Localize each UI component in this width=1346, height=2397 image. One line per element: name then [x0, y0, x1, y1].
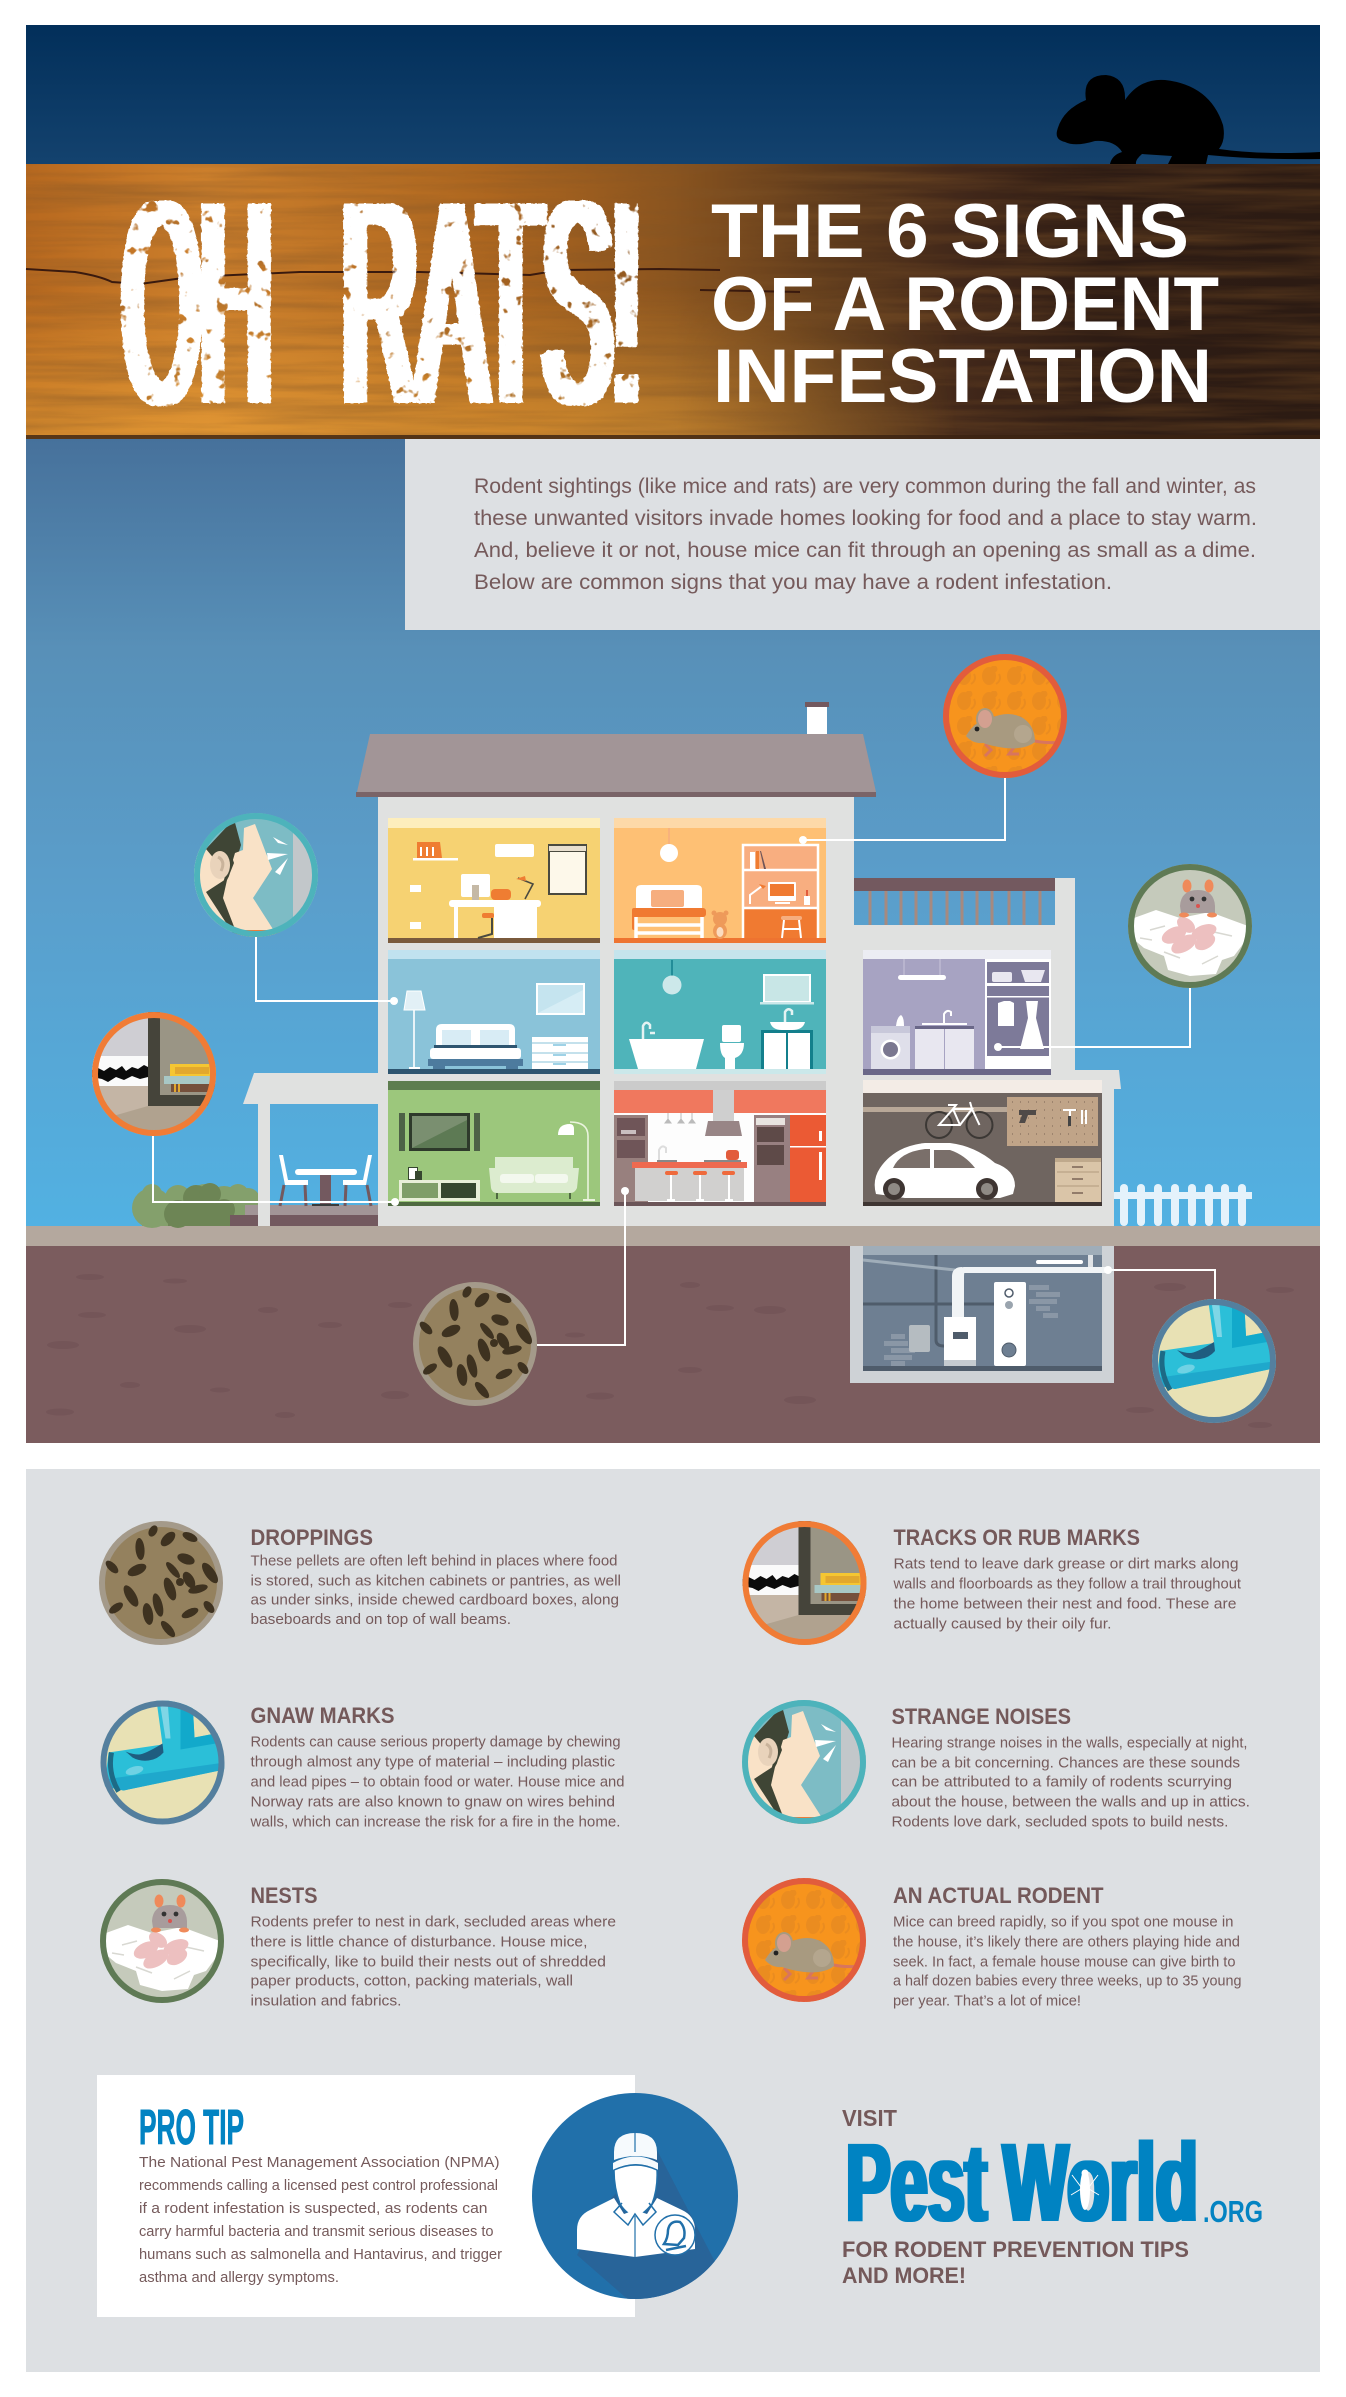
- panel: signs list background: [26, 1469, 1320, 2372]
- text: pro tip body: recommends calling a licensed pest control professional: [139, 2177, 498, 2194]
- sign: an actual rodent: [742, 1878, 1242, 2010]
- icon: pest professional badge: [532, 2093, 740, 2310]
- heading: pro tip: PRO TIP: [139, 2101, 244, 2155]
- sign: gnaw marks: and lead pipes – to obtain food or water. House mice and: [250, 1775, 624, 1791]
- sign: strange noises: [742, 1700, 1250, 1831]
- icon: termite in logo: [1071, 2170, 1099, 2210]
- callout icon: strange noises: [194, 813, 318, 938]
- sign: strange noises: about the house, between the walls and up in attics.: [892, 1795, 1250, 1811]
- panel: introduction text: Rodent sightings (like mice and rats) are very common during the fall and winter, as: [474, 475, 1256, 498]
- callout icon: tracks or rub marks: [92, 1012, 216, 1136]
- panel: introduction text: these unwanted visitors invade homes looking for food and a place to stay warm.: [474, 507, 1257, 530]
- text: pro tip body: if a rodent infestation is suspected, as rodents can: [139, 2200, 487, 2217]
- sign: tracks or rub marks: [742, 1521, 1241, 1645]
- sign: tracks or rub marks: the home between their nest and food. These are: [894, 1596, 1236, 1612]
- text: pro tip body: humans such as salmonella and Hantavirus, and trigger: [139, 2246, 502, 2263]
- sign: droppings: is stored, such as kitchen cabinets or pantries, as well: [250, 1573, 621, 1589]
- room: garage: [863, 1080, 1102, 1206]
- sign: tracks or rub marks: actually caused by their oily fur.: [894, 1616, 1112, 1632]
- panel: introduction text: [405, 439, 1320, 630]
- panel: wooden title plank: [26, 164, 1320, 439]
- room: laundry: [863, 950, 1051, 1075]
- sign: nests: Rodents prefer to nest in dark, secluded areas where: [250, 1914, 616, 1930]
- callout connector lines: [153, 778, 1215, 1345]
- sign: droppings: as under sinks, inside chewed cardboard boxes, along: [250, 1593, 619, 1609]
- sign: an actual rodent: per year. That’s a lot of mice!: [893, 1994, 1081, 2010]
- text: for rodent prevention tips: [842, 2237, 1189, 2288]
- sign: nests: insulation and fabrics.: [250, 1994, 402, 2010]
- balcony railing: [854, 878, 1055, 925]
- text: pro tip body: [139, 2154, 502, 2286]
- panel: introduction text: Below are common signs that you may have a rodent infestation.: [474, 571, 1112, 594]
- sign: nests: specifically, like to build their nests out of shredded: [250, 1954, 606, 1970]
- title: The 6 signs of a rodent infestation: THE 6 SIGNS: [711, 189, 1189, 274]
- sign: gnaw marks: [100, 1700, 624, 1831]
- sign: nests: paper products, cotton, packing materials, wall: [250, 1974, 573, 1990]
- logo: PestWorld.org: World: [1003, 2120, 1198, 2245]
- house walls and roof: [356, 702, 1121, 1226]
- sign: gnaw marks: walls, which can increase the risk for a fire in the home.: [249, 1815, 620, 1831]
- sign: strange noises: STRANGE NOISES: [892, 1704, 1071, 1729]
- sign: nests: [100, 1879, 616, 2010]
- sign: gnaw marks: through almost any type of material – including plastic: [250, 1755, 615, 1771]
- room: bathroom: [614, 950, 826, 1074]
- sign: an actual rodent: a half dozen babies every three weeks, up to 35 young: [893, 1974, 1242, 1990]
- callout icon: nests: [1128, 864, 1252, 988]
- icon: bushes: [132, 1183, 260, 1228]
- porch with table and chairs: [230, 1073, 378, 1226]
- logo: PestWorld.org: Pest: [846, 2120, 987, 2245]
- icon: mouse silhouette on the plank: [1057, 75, 1320, 164]
- sign: strange noises: can be a bit concerning. Chances are these sounds: [892, 1755, 1240, 1771]
- callout icon: gnaw marks: [1152, 1299, 1276, 1423]
- text: for rodent prevention tips: AND MORE!: [842, 2263, 966, 2288]
- room: kitchen: [614, 1081, 826, 1206]
- sign: droppings: These pellets are often left behind in places where food: [250, 1553, 618, 1569]
- sign: tracks or rub marks: walls and floorboards as they follow a trail throughout: [892, 1576, 1241, 1592]
- sign: an actual rodent: seek. In fact, a female house mouse can give birth to: [893, 1954, 1236, 1970]
- panel: pro tip: [97, 2075, 635, 2317]
- room: basement: [850, 1246, 1114, 1383]
- sign: gnaw marks: Norway rats are also known to gnaw on wires behind: [250, 1795, 615, 1811]
- text: pro tip body: asthma and allergy symptoms.: [139, 2269, 339, 2286]
- callout icon: droppings: [416, 1285, 535, 1403]
- sign: strange noises: can be attributed to a family of rodents scurrying: [892, 1775, 1232, 1791]
- white picket fence: [1114, 1184, 1252, 1226]
- sign: tracks or rub marks: Rats tend to leave dark grease or dirt marks along: [894, 1556, 1238, 1572]
- room: office: [388, 818, 600, 943]
- panel: introduction text: And, believe it or not, house mice can fit through an opening as small as a dime.: [474, 539, 1256, 562]
- room: bedroom: [388, 950, 600, 1074]
- title: Oh Rats!: OH: [123, 141, 272, 465]
- room: kids bedroom: [614, 818, 826, 943]
- logo: PestWorld.org: .ORG: [1203, 2194, 1263, 2229]
- sign: tracks or rub marks: TRACKS OR RUB MARKS: [894, 1525, 1140, 1550]
- text: for rodent prevention tips: FOR RODENT PREVENTION TIPS: [842, 2237, 1189, 2262]
- title: The 6 signs of a rodent infestation: OF A RODENT: [711, 262, 1219, 347]
- title: The 6 signs of a rodent infestation: [711, 189, 1219, 419]
- sign: an actual rodent: the house, it’s likely there are others playing hide and: [893, 1934, 1240, 1950]
- sign: an actual rodent: Mice can breed rapidly, so if you spot one mouse in: [893, 1914, 1234, 1930]
- text: pro tip body: The National Pest Management Association (NPMA): [139, 2154, 500, 2171]
- panel: wooden title plank: RATS!: [342, 141, 641, 465]
- sign: strange noises: Hearing strange noises in the walls, especially at night,: [892, 1736, 1248, 1752]
- panel: night sky background: [26, 25, 1320, 1226]
- logo: PestWorld.org: [846, 2120, 1263, 2245]
- room: living room: [388, 1081, 600, 1206]
- sign: nests: there is little chance of disturbance. House mice,: [250, 1934, 588, 1950]
- callout icon: actual rodent: [943, 654, 1067, 778]
- sign: strange noises: Rodents love dark, secluded spots to build nests.: [892, 1815, 1228, 1831]
- ground strip and soil: [26, 1226, 1320, 1443]
- sign: nests: NESTS: [250, 1883, 318, 1908]
- sign: an actual rodent: AN ACTUAL RODENT: [893, 1883, 1104, 1908]
- sign: gnaw marks: GNAW MARKS: [250, 1703, 394, 1728]
- sign: droppings: [102, 1524, 621, 1642]
- sign: droppings: DROPPINGS: [250, 1525, 373, 1550]
- sign: gnaw marks: Rodents can cause serious property damage by chewing: [250, 1735, 620, 1751]
- text: pro tip body: carry harmful bacteria and transmit serious diseases to: [139, 2223, 494, 2240]
- title: The 6 signs of a rodent infestation: INFESTATION: [713, 334, 1212, 419]
- sign: droppings: baseboards and on top of wall beams.: [250, 1612, 511, 1628]
- text: visit: VISIT: [842, 2105, 897, 2131]
